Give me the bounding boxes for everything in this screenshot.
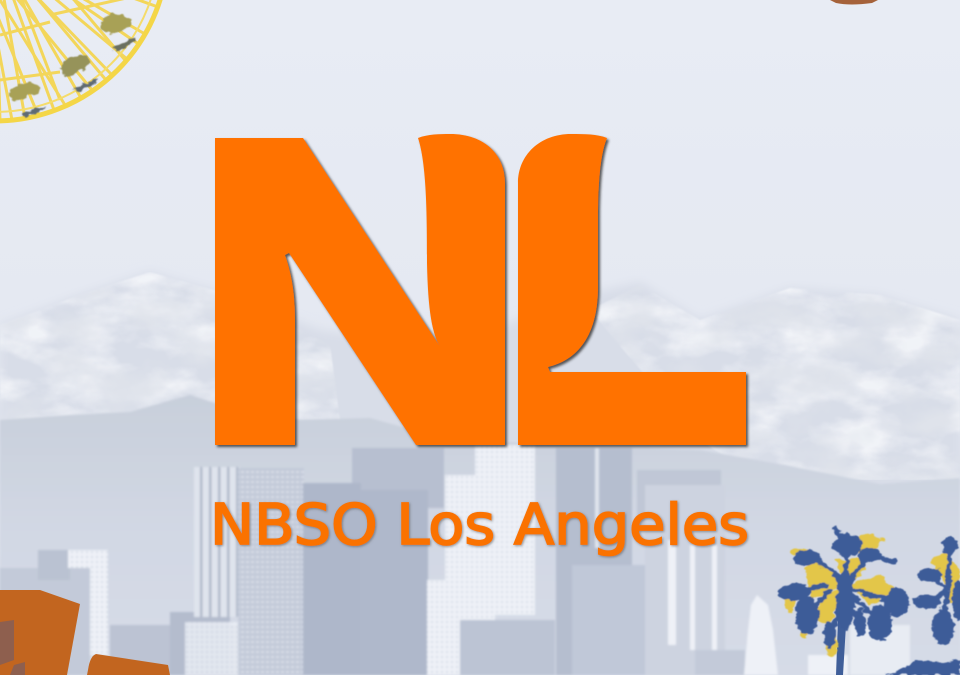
yellow frond accents <box>785 532 895 657</box>
gondolas <box>9 14 137 117</box>
ferris wheel <box>0 0 168 121</box>
low mid-rise block <box>110 612 240 675</box>
orange buildings <box>0 590 170 675</box>
letter L <box>518 134 746 445</box>
top right fragment <box>830 0 878 4</box>
foothills <box>0 395 960 675</box>
letter N <box>215 134 505 445</box>
striped tower <box>194 467 240 617</box>
tall tower with windows <box>238 468 304 675</box>
logo: NL mark <box>215 134 746 445</box>
dark towers <box>303 448 444 675</box>
blue fronds <box>795 528 897 636</box>
shrub: lower right <box>885 660 960 675</box>
white towers <box>427 445 555 675</box>
city hall <box>744 595 778 675</box>
downtown skyline <box>0 445 910 675</box>
distant right buildings <box>808 625 910 675</box>
grey towers <box>556 448 648 675</box>
far left buildings <box>0 550 108 675</box>
palm tree: right <box>913 537 960 645</box>
palm tree: centre <box>779 528 909 675</box>
title text: NBSO Los Angeles <box>210 493 749 558</box>
snowy mountains <box>0 272 960 490</box>
right towers <box>637 470 745 675</box>
